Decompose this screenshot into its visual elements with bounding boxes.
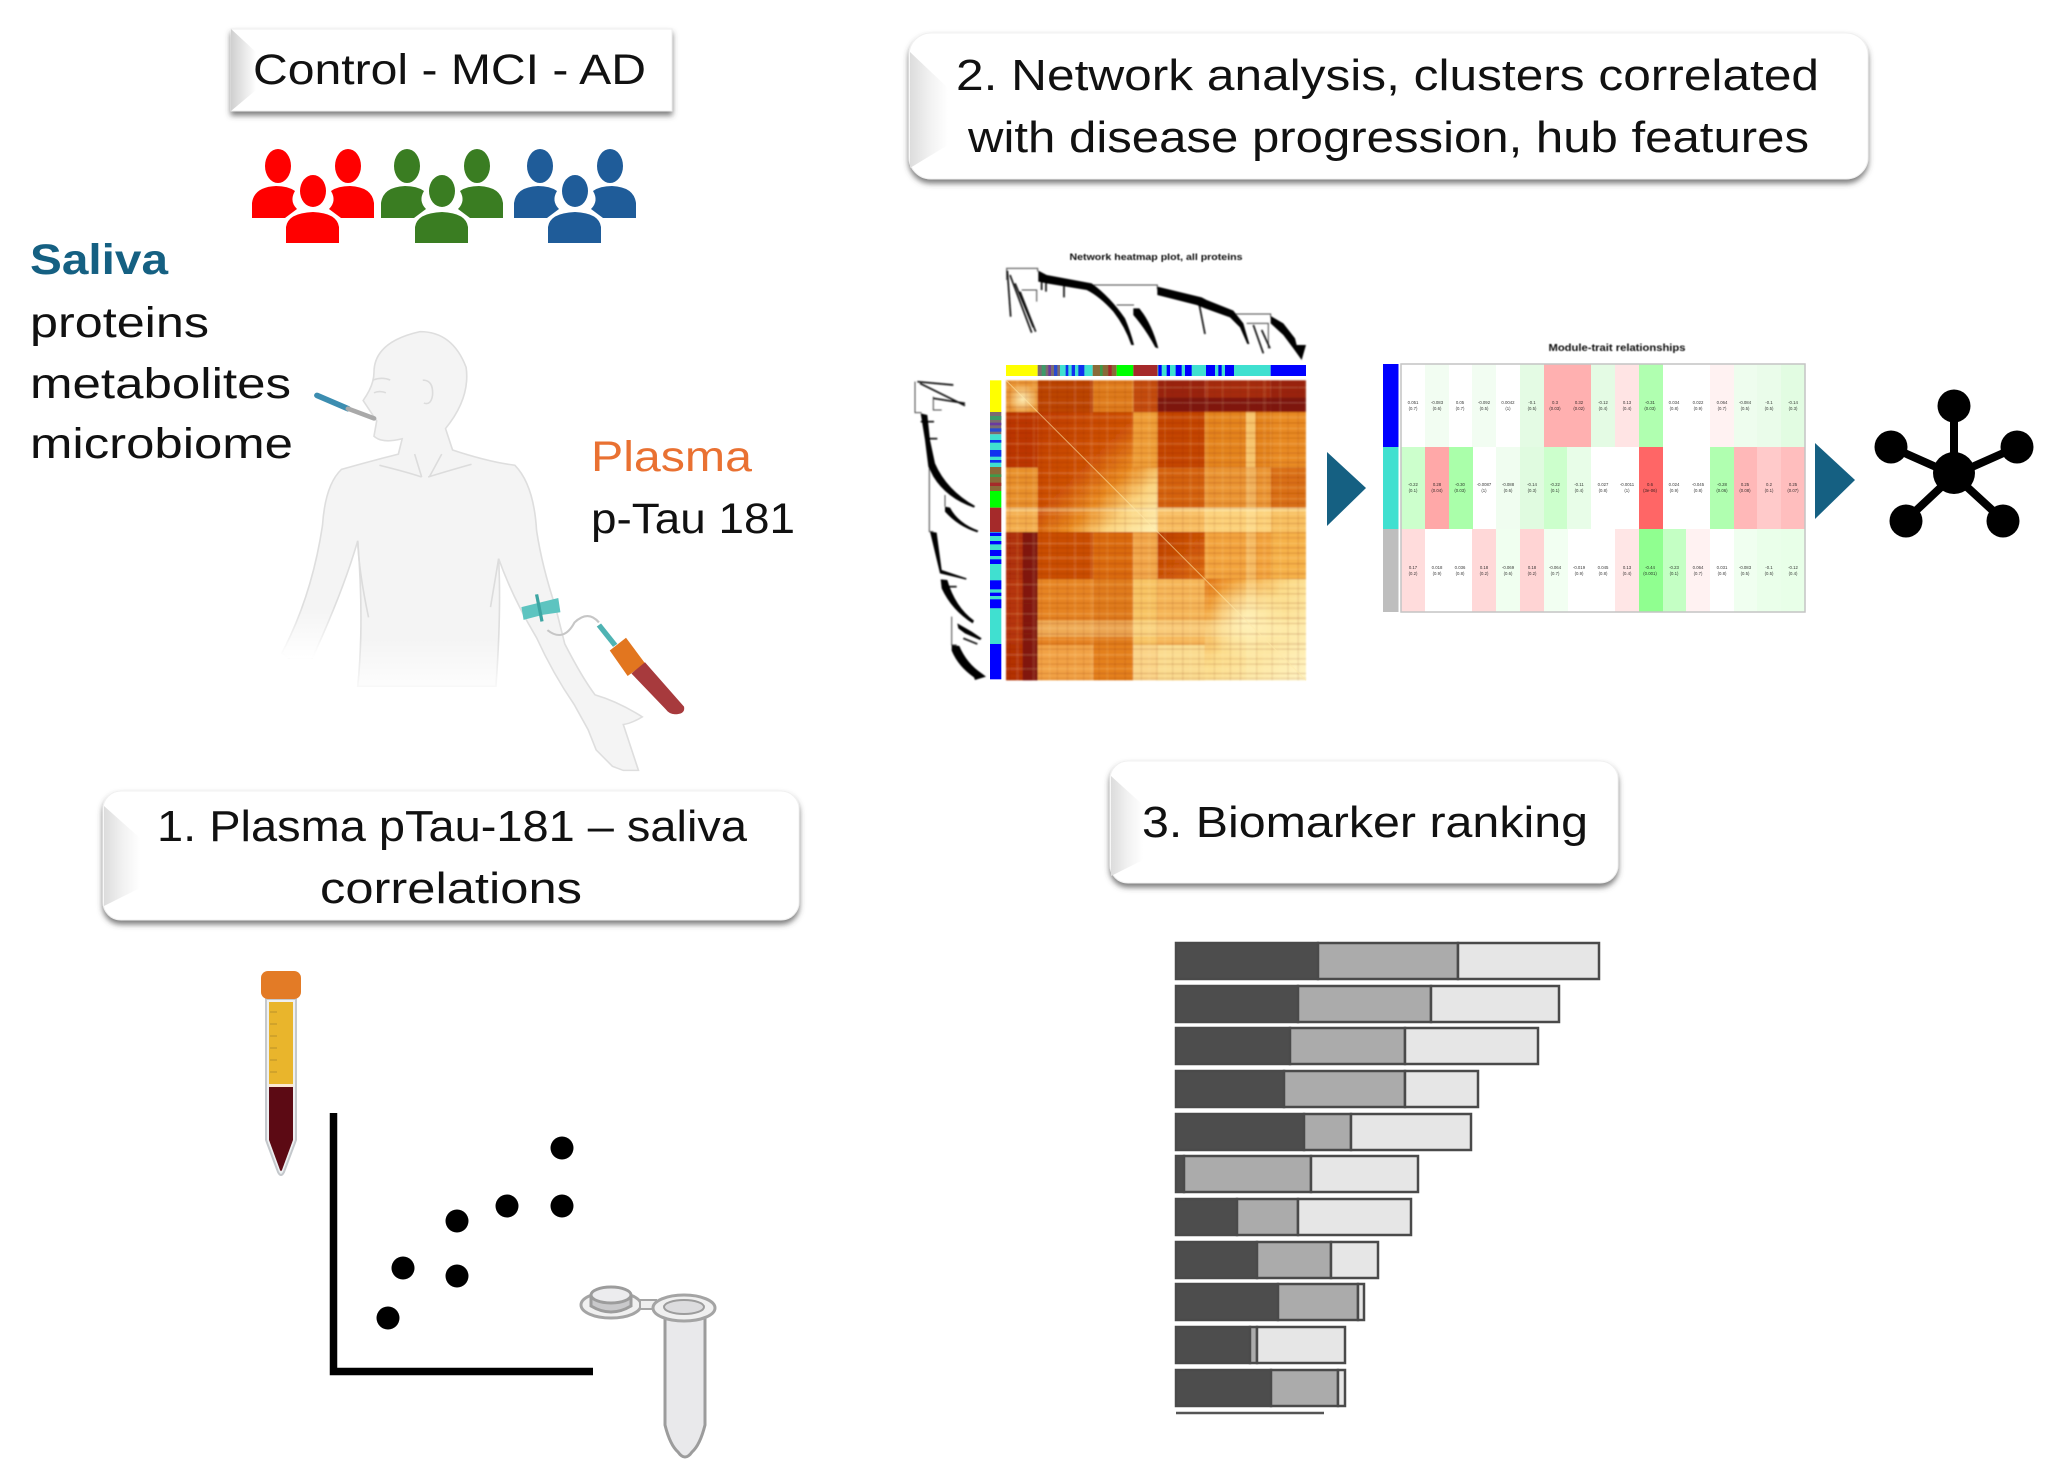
correlation values: 0.051 (1408, 400, 1419, 405)
heading box: step 2: 2. Network analysis, clusters correlated (956, 51, 1819, 100)
correlation values: (0.9) (1575, 571, 1584, 576)
module colour bar (1383, 364, 1398, 612)
correlation values: (0.1) (1409, 488, 1418, 493)
correlation values: (0.8) (1599, 571, 1608, 576)
correlation values: (0.2) (1480, 571, 1489, 576)
text block: saliva analytes: Saliva (30, 236, 169, 284)
bar 1 (1176, 943, 1599, 979)
bar 8 (1176, 1242, 1378, 1278)
correlation values (1408, 400, 1799, 576)
correlation values: -0.22 (1408, 482, 1419, 487)
correlation values: -0.084 (1739, 400, 1752, 405)
correlation values: (0.8) (1670, 406, 1679, 411)
chart: biomarker ranking stacked bars (1176, 943, 1599, 1413)
correlation values: (0.4) (1623, 406, 1632, 411)
correlation values: 0.064 (1693, 565, 1704, 570)
correlation values: (0.07) (1787, 488, 1799, 493)
text block: plasma marker: Plasma (591, 433, 752, 481)
correlation values: 0.2 (1766, 482, 1773, 487)
correlation values: -0.045 (1692, 482, 1705, 487)
correlation values: (0.2) (1409, 571, 1418, 576)
panel: study groups (231, 29, 672, 243)
chart data points (376, 1136, 574, 1330)
correlation cells (1401, 364, 1805, 612)
correlation values: -0.14 (1527, 482, 1538, 487)
correlation values: -0.14 (1788, 400, 1799, 405)
correlation values: -0.092 (1478, 400, 1491, 405)
correlation values: -0.30 (1455, 482, 1466, 487)
chart title: Network heatmap plot, all proteins (1070, 252, 1242, 262)
icon: blue participant group (514, 149, 636, 243)
correlation values: (0.3) (1789, 406, 1798, 411)
correlation values: 0.13 (1623, 565, 1632, 570)
icon: saliva swab (317, 395, 374, 418)
chart: network heatmap (915, 252, 1306, 680)
correlation values: -0.1 (1528, 400, 1536, 405)
bar 3 (1176, 1028, 1538, 1064)
correlation values: (1) (1624, 488, 1630, 493)
correlation values: -0.31 (1645, 400, 1656, 405)
correlation values: -0.0011 (1620, 482, 1635, 487)
correlation values: -0.019 (1573, 565, 1586, 570)
heading box: step 2 (909, 33, 1868, 179)
correlation values: (0.5) (1765, 571, 1774, 576)
correlation values: 0.034 (1669, 400, 1680, 405)
correlation values: (0.4) (1575, 488, 1584, 493)
correlation values: (0.001) (1643, 571, 1657, 576)
correlation values: (0.7) (1551, 571, 1560, 576)
arrow: heatmap to module-trait (1327, 452, 1366, 526)
icon: saliva microtube (581, 1287, 715, 1457)
heading box: step 3: 3. Biomarker ranking (1142, 798, 1588, 847)
correlation values: -0.28 (1717, 482, 1728, 487)
heading box: step 1: correlations (320, 864, 582, 913)
correlation values: (0.5) (1741, 406, 1750, 411)
correlation values: 0.036 (1455, 565, 1466, 570)
correlation values: 0.32 (1575, 400, 1584, 405)
correlation values: (0.02) (1573, 406, 1585, 411)
chart: correlation scatter plot (334, 1113, 593, 1372)
text block: saliva analytes: metabolites (30, 360, 291, 408)
correlation values: 0.022 (1693, 400, 1704, 405)
arrow: module-trait to hub network (1815, 443, 1855, 519)
correlation values: -0.12 (1598, 400, 1609, 405)
correlation values: (0.9) (1694, 406, 1703, 411)
figure: body silhouette (260, 332, 642, 770)
text block: plasma marker: p-Tau 181 (591, 495, 795, 543)
correlation values: (1) (1481, 488, 1487, 493)
correlation values: 0.13 (1623, 400, 1632, 405)
correlation values: (1) (1505, 406, 1511, 411)
correlation values: -0.23 (1669, 565, 1680, 570)
correlation values: 0.3 (1552, 400, 1559, 405)
text block: saliva analytes: proteins (30, 299, 209, 347)
correlation values: 0.018 (1432, 565, 1443, 570)
correlation values: (0.1) (1670, 571, 1679, 576)
correlation values: 0.18 (1528, 565, 1537, 570)
correlation values: -0.083 (1431, 400, 1444, 405)
heading box: Control - MCI - AD (231, 29, 672, 111)
bar 2 (1176, 986, 1559, 1022)
correlation values: (3e-06) (1643, 488, 1657, 493)
correlation values: 0.05 (1456, 400, 1465, 405)
correlation values: -0.1 (1765, 400, 1773, 405)
chart title: Module-trait relationships (1548, 343, 1686, 354)
icon: plasma centrifuge tube (261, 971, 301, 1175)
bar 12 cropped (1176, 1412, 1324, 1414)
correlation values: (0.06) (1716, 488, 1728, 493)
correlation values: (0.03) (1454, 488, 1466, 493)
correlation values: (0.08) (1739, 488, 1751, 493)
correlation values: -0.064 (1549, 565, 1562, 570)
correlation values: (0.7) (1718, 406, 1727, 411)
correlation values: 0.6 (1647, 482, 1654, 487)
correlation values: -0.44 (1645, 565, 1656, 570)
bar 10 (1176, 1327, 1345, 1363)
bar 11 (1176, 1370, 1345, 1406)
chart axes (334, 1113, 593, 1372)
correlation values: (0.5) (1528, 406, 1537, 411)
top module colour bar (1006, 365, 1306, 376)
correlation values: (0.5) (1480, 406, 1489, 411)
correlation values: (0.4) (1623, 571, 1632, 576)
left dendrogram (915, 382, 986, 680)
correlation values: -0.11 (1574, 482, 1584, 487)
correlation values: (0.03) (1644, 406, 1656, 411)
correlation values: (0.8) (1599, 488, 1608, 493)
icon: red participant group (252, 149, 374, 243)
correlation values: (0.8) (1694, 488, 1703, 493)
correlation values: -0.0087 (1477, 482, 1492, 487)
correlation values: -0.12 (1788, 565, 1799, 570)
heading box: step 3 (1110, 761, 1618, 883)
correlation values: 0.064 (1717, 400, 1728, 405)
illustration: human figure sampling saliva and blood (260, 332, 684, 770)
correlation values: (0.5) (1765, 406, 1774, 411)
heading box: step 2: with disease progression, hub features (967, 113, 1809, 162)
text block: plasma marker (591, 433, 795, 543)
correlation values: 0.045 (1598, 565, 1609, 570)
correlation values: (0.7) (1456, 406, 1465, 411)
text block: saliva analytes (30, 236, 293, 468)
correlation values: -0.1 (1765, 565, 1773, 570)
correlation values: 0.25 (1789, 482, 1798, 487)
correlation values: -0.069 (1502, 565, 1515, 570)
correlation values: 0.28 (1433, 482, 1442, 487)
correlation values: (0.8) (1718, 571, 1727, 576)
correlation values: (0.5) (1741, 571, 1750, 576)
correlation values: -0.083 (1739, 565, 1752, 570)
correlation values: (0.1) (1551, 488, 1560, 493)
correlation values: (0.7) (1694, 571, 1703, 576)
top dendrogram (1007, 268, 1306, 360)
bar 5 (1176, 1114, 1471, 1150)
correlation values: (0.4) (1599, 406, 1608, 411)
correlation values: -0.088 (1502, 482, 1515, 487)
correlation values: (0.6) (1504, 571, 1513, 576)
correlation values: (0.04) (1431, 488, 1443, 493)
correlation values: 0.18 (1480, 565, 1489, 570)
correlation values: (0.2) (1528, 571, 1537, 576)
correlation values: 0.024 (1669, 482, 1680, 487)
icon: blood draw needle and tube (521, 594, 684, 714)
bar 6 (1176, 1156, 1418, 1192)
correlation values: (0.03) (1549, 406, 1561, 411)
correlation values: (0.3) (1528, 488, 1537, 493)
correlation values: (0.7) (1409, 406, 1418, 411)
correlation values: -0.22 (1550, 482, 1561, 487)
correlation values: 0.0042 (1501, 400, 1515, 405)
bar 9 (1176, 1284, 1364, 1320)
left module colour bar (990, 380, 1001, 679)
heatmap body with dendrograms (915, 268, 1306, 680)
chart: module-trait relationships (1383, 343, 1805, 612)
correlation values: 0.031 (1717, 565, 1728, 570)
correlation values: (0.8) (1456, 571, 1465, 576)
correlation values: (0.9) (1670, 488, 1679, 493)
heading box: Control - MCI - AD: Control - MCI - AD (253, 46, 646, 94)
text block: saliva analytes: microbiome (30, 420, 293, 468)
icon: hub network (1874, 390, 2034, 538)
correlation values: 0.25 (1741, 482, 1750, 487)
correlation values: 0.17 (1409, 565, 1418, 570)
correlation values: (0.6) (1504, 488, 1513, 493)
correlation values: (0.4) (1789, 571, 1798, 576)
bar 4 (1176, 1071, 1478, 1107)
heatmap cells (1006, 380, 1306, 680)
heading box: step 1 (103, 791, 799, 920)
correlation values: 0.027 (1598, 482, 1609, 487)
correlation values: (0.1) (1765, 488, 1774, 493)
correlation values: (0.6) (1433, 406, 1442, 411)
icon: green participant group (381, 149, 503, 243)
heading box: step 1: 1. Plasma pTau-181 – saliva (157, 802, 748, 851)
bar 7 (1176, 1199, 1411, 1235)
correlation values: (0.9) (1433, 571, 1442, 576)
